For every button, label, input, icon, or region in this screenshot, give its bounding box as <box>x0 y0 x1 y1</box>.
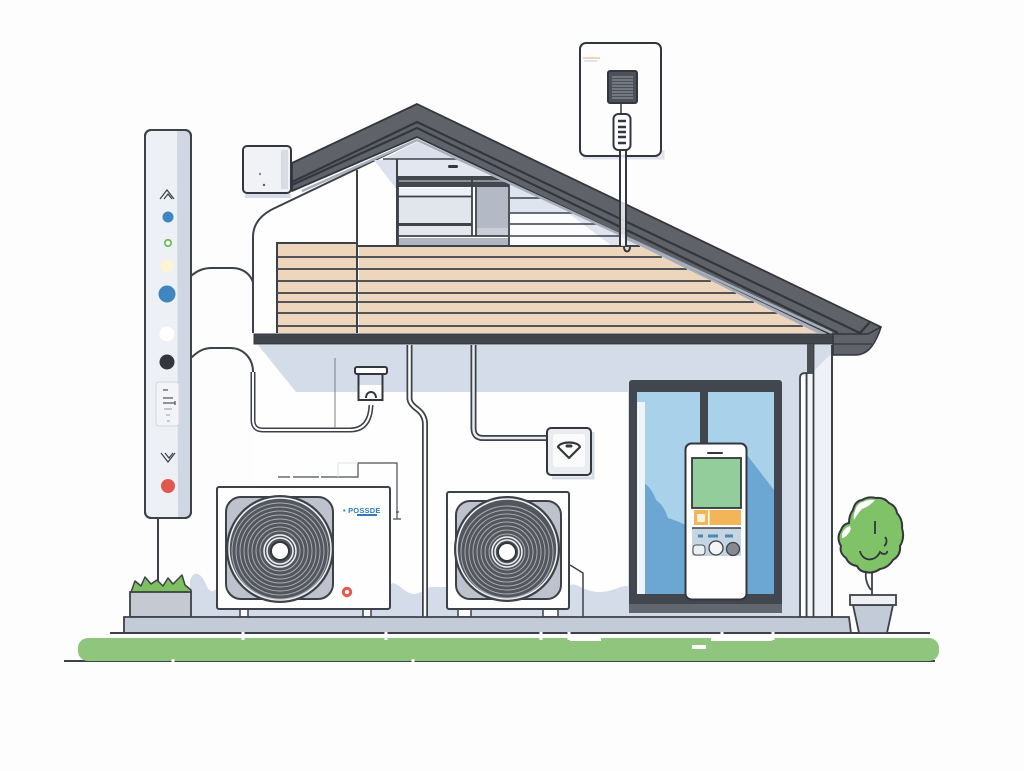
gable slats <box>510 183 644 246</box>
lawn strip <box>78 632 939 664</box>
orange status band <box>694 510 741 525</box>
central downpipe <box>410 345 425 617</box>
concrete slab <box>124 617 851 633</box>
wires from column to house <box>158 268 253 590</box>
gable window <box>398 159 509 246</box>
indicator dots <box>158 212 176 493</box>
refrigerant pipe to connector <box>253 358 371 430</box>
pipe connector <box>355 367 387 400</box>
gable wall and siding <box>253 140 832 333</box>
roof <box>292 104 881 335</box>
wall thermostat <box>547 428 593 478</box>
plant pot <box>850 595 896 633</box>
control row <box>692 528 741 556</box>
wood siding <box>277 243 817 333</box>
pipe to thermostat <box>474 345 548 438</box>
window <box>629 380 782 613</box>
wall-mounted panel with grille <box>580 43 663 252</box>
red indicator <box>343 588 351 596</box>
outdoor unit 1 <box>217 487 390 617</box>
handheld controller <box>686 444 746 600</box>
green screen <box>692 458 741 508</box>
fan coil <box>455 497 559 601</box>
signal wiring above unit <box>278 463 401 519</box>
roof eave <box>254 327 881 355</box>
fan coil <box>227 496 333 602</box>
grass planter <box>130 575 191 617</box>
small status card <box>156 382 179 426</box>
house wall <box>190 345 833 617</box>
corner wall box <box>243 146 291 196</box>
down chevrons <box>161 453 175 462</box>
tall control column <box>145 130 191 518</box>
ground lines <box>64 633 935 661</box>
potted shrub <box>838 497 903 633</box>
up chevrons <box>160 190 174 199</box>
outdoor unit 2 <box>447 492 583 617</box>
brand label: • POSSDE <box>343 506 381 515</box>
downspout column <box>800 344 814 617</box>
